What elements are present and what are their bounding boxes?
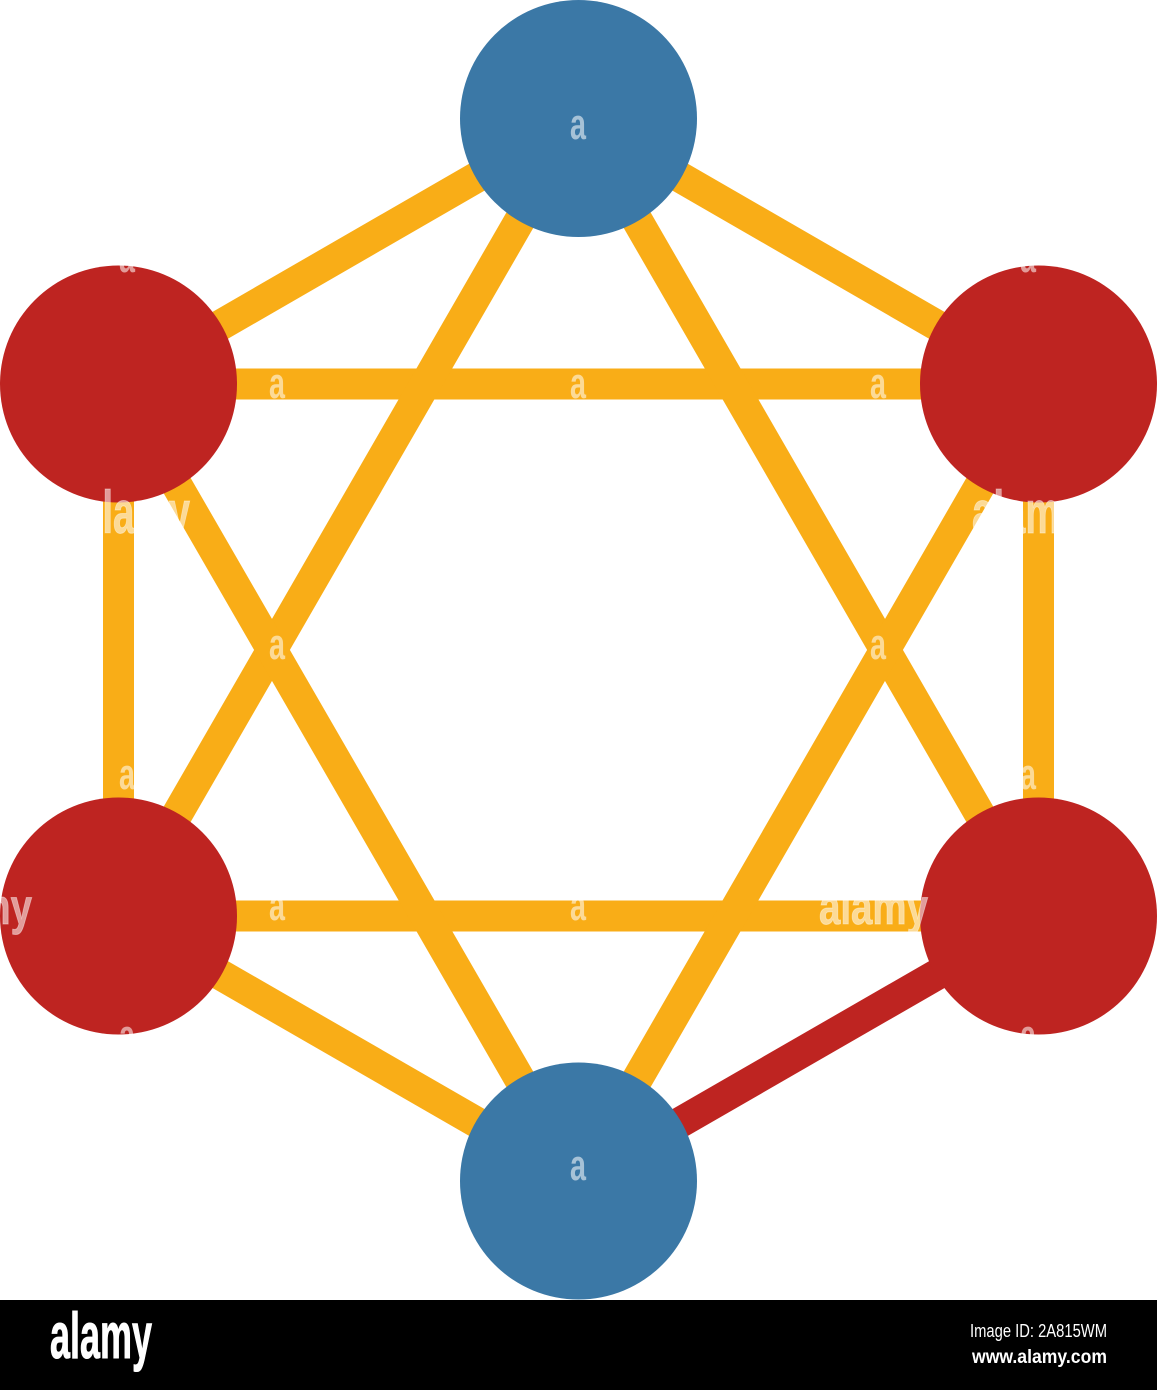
- watermark marks: a: [570, 359, 586, 408]
- watermark marks: a: [570, 881, 586, 930]
- watermark marks: a: [119, 1011, 135, 1060]
- watermark marks: a: [870, 359, 886, 408]
- watermark marks: alamy: [972, 479, 1081, 546]
- watermark marks: a: [570, 1141, 586, 1190]
- footer logo: alamy: [50, 1299, 152, 1372]
- watermark marks: a: [570, 100, 586, 149]
- watermark marks: alamy: [819, 879, 928, 935]
- watermark marks: a: [269, 359, 285, 408]
- yellow connector lines: [118, 118, 1038, 1181]
- red node: lower left: [0, 798, 237, 1034]
- image id: Image ID: 2A815WM: [970, 1321, 1107, 1341]
- website: www.alamy.com: [971, 1347, 1107, 1368]
- red node: upper right: [920, 266, 1157, 502]
- watermark marks: a: [269, 881, 285, 930]
- red connector line: [578, 916, 1038, 1181]
- red node: lower right: [920, 798, 1157, 1034]
- watermark marks: a: [269, 620, 285, 669]
- watermark marks: a: [119, 750, 135, 799]
- watermark marks: a: [1020, 233, 1036, 282]
- watermark marks: alamy: [81, 479, 190, 546]
- watermark marks: [0, 100, 1081, 1190]
- blue node: top: [460, 0, 697, 237]
- watermark marks: a: [1020, 750, 1036, 799]
- watermark marks: a: [1020, 1011, 1036, 1060]
- watermark marks: a: [870, 620, 886, 669]
- red node: upper left: [0, 266, 237, 502]
- footer bar: [0, 1299, 1157, 1390]
- watermark marks: a: [119, 233, 135, 282]
- blue node: bottom: [460, 1062, 697, 1300]
